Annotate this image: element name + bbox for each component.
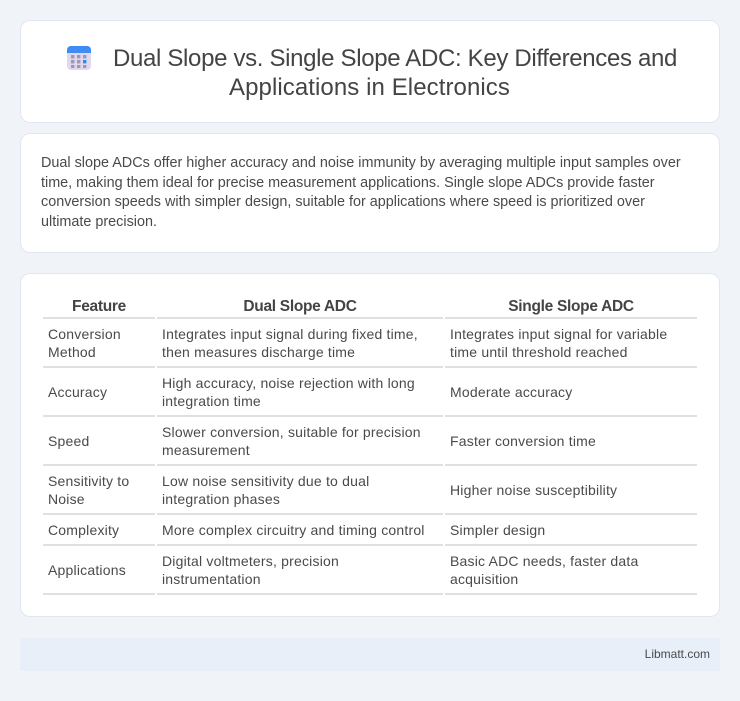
row: Conversion Method: Integrates input signal during fixed time, (162, 326, 418, 342)
row: Accuracy (48, 375, 572, 409)
row: Speed (48, 424, 596, 458)
footer bar (20, 638, 720, 671)
title (113, 45, 677, 101)
row: Accuracy: integration time (162, 393, 261, 409)
summary text: time, making them ideal for precise measurement applications. Single slope ADCs provide faster (41, 174, 654, 190)
column heading: Dual Slope ADC: Dual Slope ADC (243, 298, 357, 315)
row: Sensitivity to Noise: integration phases (162, 491, 280, 507)
panel: summary (20, 133, 720, 253)
row: Complexity (48, 522, 545, 538)
row: Conversion Method: time until threshold reached (450, 344, 628, 360)
column heading: Feature: Feature (72, 298, 126, 315)
footer credit: Libmatt.com (645, 647, 710, 661)
row: Complexity: Simpler design (450, 522, 545, 538)
row: Applications: Applications (48, 562, 126, 578)
row: Conversion Method (48, 326, 667, 360)
summary text: conversion speeds with simpler design, suitable for applications where speed is prioritized over (41, 194, 645, 210)
panel: comparison table (20, 273, 720, 617)
row: Speed: Speed (48, 433, 89, 449)
row: Sensitivity to Noise: Noise (48, 491, 85, 507)
row: Accuracy: Accuracy (48, 384, 107, 400)
row: Conversion Method: Method (48, 344, 96, 360)
row: Sensitivity to Noise: Low noise sensitivity due to dual (162, 473, 369, 489)
row: Applications: acquisition (450, 571, 518, 587)
comparison table (43, 298, 697, 595)
summary text (41, 155, 681, 230)
row: Accuracy: Moderate accuracy (450, 384, 572, 400)
icon: calendar (67, 46, 91, 70)
row: Speed: measurement (162, 442, 250, 458)
title: Applications in Electronics (229, 74, 510, 101)
summary text: ultimate precision. (41, 214, 157, 230)
row: Speed: Slower conversion, suitable for precision (162, 424, 421, 440)
summary text: Dual slope ADCs offer higher accuracy and noise immunity by averaging multiple input samples over (41, 155, 681, 171)
panel: title header (20, 20, 720, 123)
row: Sensitivity to Noise: Sensitivity to (48, 473, 129, 489)
row: Applications (48, 553, 638, 587)
title: Dual Slope vs. Single Slope ADC: Key Differences and (113, 45, 677, 72)
row: Speed: Faster conversion time (450, 433, 596, 449)
column heading: Single Slope ADC: Single Slope ADC (508, 298, 634, 315)
row: Complexity: Complexity (48, 522, 119, 538)
row: Complexity: More complex circuitry and timing control (162, 522, 425, 538)
row: Sensitivity to Noise: Higher noise susceptibility (450, 482, 617, 498)
row: Applications: Basic ADC needs, faster data (450, 553, 638, 569)
row: Applications: Digital voltmeters, precision (162, 553, 339, 569)
row: Conversion Method: Integrates input signal for variable (450, 326, 667, 342)
row: Accuracy: High accuracy, noise rejection with long (162, 375, 415, 391)
row: Conversion Method: Conversion (48, 326, 121, 342)
row: Sensitivity to Noise (48, 473, 617, 507)
row: Applications: instrumentation (162, 571, 261, 587)
row: Conversion Method: then measures discharge time (162, 344, 355, 360)
